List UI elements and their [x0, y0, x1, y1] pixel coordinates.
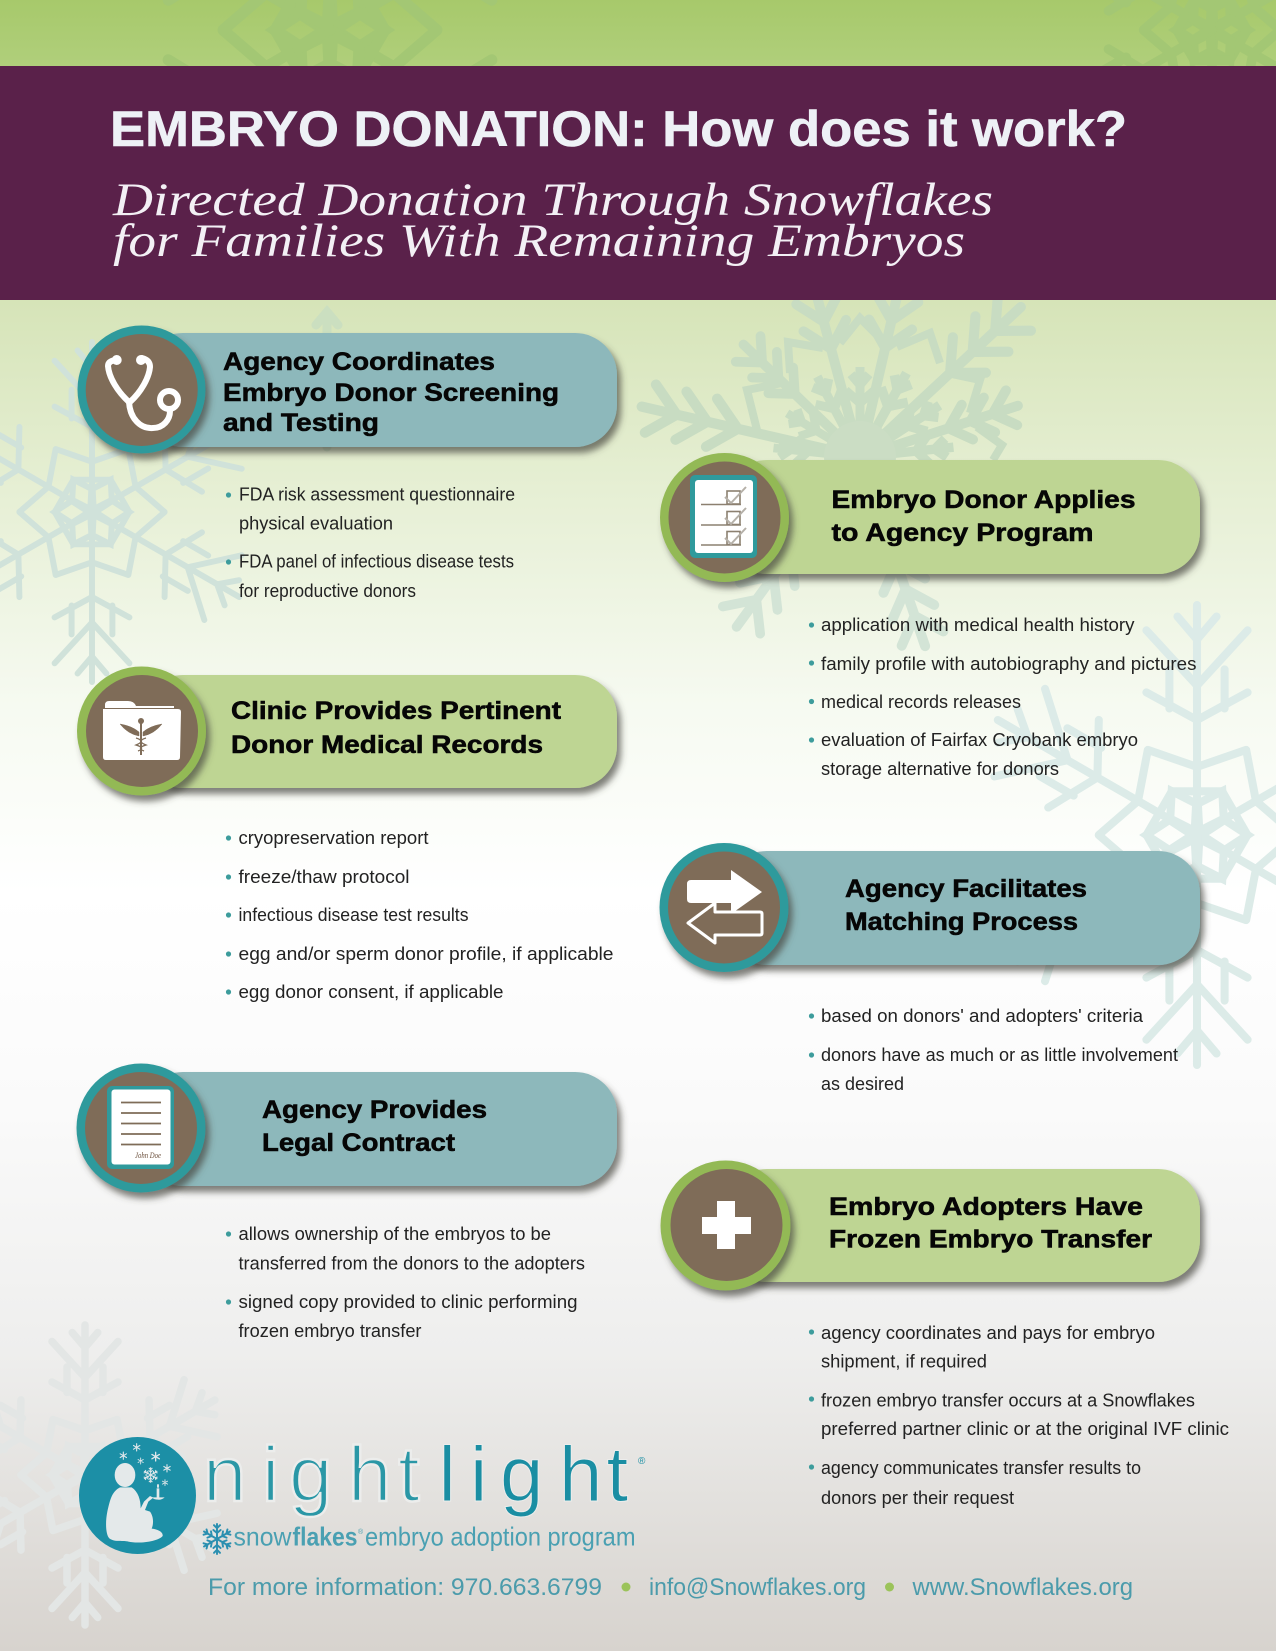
bullet list: evaluation of Fairfax Cryobank embryo — [821, 729, 1138, 750]
bullet list: agency coordinates and pays for embryo — [821, 1322, 1155, 1343]
icon: child with candle — [79, 1437, 196, 1554]
bullet list: signed copy provided to clinic performing — [238, 1291, 578, 1312]
icon: checklist — [690, 475, 757, 558]
bullet list — [226, 827, 614, 1002]
heading: and Testing — [223, 409, 379, 437]
panel: agency provides legal contract — [76, 1064, 617, 1341]
contact line: For more information: 970.663.6799 — [208, 1574, 602, 1601]
heading: Legal Contract — [262, 1129, 456, 1157]
panel: agency facilitates matching — [660, 843, 1200, 1094]
subtitle: for Families With Remaining Embryos — [113, 215, 965, 267]
icon: snowflake mark — [202, 1524, 232, 1554]
top green band — [0, 0, 1276, 280]
heading: Frozen Embryo Transfer — [829, 1226, 1152, 1254]
bullet list: agency communicates transfer results to — [821, 1457, 1141, 1478]
bullet list: frozen embryo transfer — [238, 1320, 422, 1341]
contact line — [208, 1574, 1133, 1601]
bullet list: for reproductive donors — [239, 580, 416, 601]
bullet list: physical evaluation — [239, 512, 393, 534]
bullet list: donors have as much or as little involvement — [821, 1044, 1178, 1065]
bullet list — [226, 484, 515, 601]
heading: Agency Coordinates — [223, 348, 495, 376]
icon: contract — [107, 1086, 174, 1169]
bullet list — [809, 1005, 1178, 1094]
heading — [223, 348, 559, 437]
bullet list: allows ownership of the embryos to be — [238, 1223, 551, 1244]
bullet list: frozen embryo transfer occurs at a Snowflakes — [821, 1390, 1195, 1410]
bullet list: shipment, if required — [821, 1350, 987, 1372]
bullet list: infectious disease test results — [238, 904, 468, 925]
title: EMBRYO DONATION: How does it work? — [110, 101, 1127, 157]
bullet list: medical records releases — [821, 691, 1021, 712]
icon: medical cross — [702, 1201, 751, 1249]
wordmark: light — [438, 1430, 628, 1518]
bullet list — [809, 1322, 1229, 1508]
bullet list: storage alternative for donors — [821, 758, 1059, 779]
program name — [234, 1522, 636, 1552]
bullet list: egg and/or sperm donor profile, if applicable — [238, 943, 614, 964]
subtitle — [112, 174, 993, 267]
heading — [231, 697, 562, 759]
heading: Embryo Adopters Have — [829, 1193, 1143, 1221]
icon: stethoscope — [108, 358, 178, 428]
subtitle: Directed Donation Through Snowflakes — [112, 174, 993, 226]
contact line: info@Snowflakes.org — [649, 1574, 866, 1601]
heading — [845, 875, 1087, 936]
contact line: www.Snowflakes.org — [912, 1574, 1133, 1601]
bullet list: as desired — [821, 1073, 904, 1094]
bullet list: cryopreservation report — [238, 827, 428, 848]
wordmark — [203, 1430, 646, 1518]
program name: snow — [234, 1522, 292, 1552]
heading: Agency Facilitates — [845, 875, 1087, 903]
heading: Clinic Provides Pertinent — [231, 697, 562, 725]
heading: Donor Medical Records — [231, 731, 543, 759]
bullet list: based on donors' and adopters' criteria — [821, 1005, 1144, 1026]
panel: agency coordinates screening — [78, 326, 617, 601]
program name: flakes — [292, 1522, 358, 1552]
bullet list: application with medical health history — [821, 614, 1135, 635]
bullet list: FDA panel of infectious disease tests — [239, 550, 514, 572]
bullet list — [226, 1223, 585, 1341]
heading — [832, 486, 1136, 547]
heading — [829, 1193, 1152, 1254]
heading: Matching Process — [845, 908, 1078, 936]
icon: matching arrows — [687, 870, 762, 943]
program name: ® — [358, 1528, 364, 1536]
panel: embryo donor applies — [660, 453, 1200, 779]
bullet list: freeze/thaw protocol — [238, 866, 410, 887]
bullet list: FDA risk assessment questionnaire — [239, 484, 515, 504]
panel: clinic provides records — [77, 666, 617, 1002]
bullet list: donors per their request — [821, 1487, 1014, 1508]
bullet list: preferred partner clinic or at the original IVF clinic — [821, 1418, 1229, 1439]
icon: medical folder — [103, 701, 181, 760]
heading: Embryo Donor Applies — [832, 486, 1136, 514]
bullet list: egg donor consent, if applicable — [238, 981, 504, 1002]
heading: to Agency Program — [832, 519, 1094, 547]
heading — [262, 1096, 487, 1157]
logo: nightlight — [79, 1430, 646, 1554]
panel: embryo adopters transfer — [660, 1160, 1229, 1508]
icon: contract: John Doe — [135, 1151, 161, 1160]
bullet list: family profile with autobiography and pictures — [821, 653, 1196, 674]
wordmark: night — [203, 1430, 420, 1518]
bullet list — [809, 614, 1196, 779]
program name: embryo adoption program — [365, 1522, 636, 1552]
title banner — [0, 66, 1276, 300]
wordmark: ® — [638, 1456, 646, 1467]
heading: Embryo Donor Screening — [223, 379, 559, 407]
heading: Agency Provides — [262, 1096, 487, 1124]
bullet list: transferred from the donors to the adopters — [238, 1252, 585, 1274]
